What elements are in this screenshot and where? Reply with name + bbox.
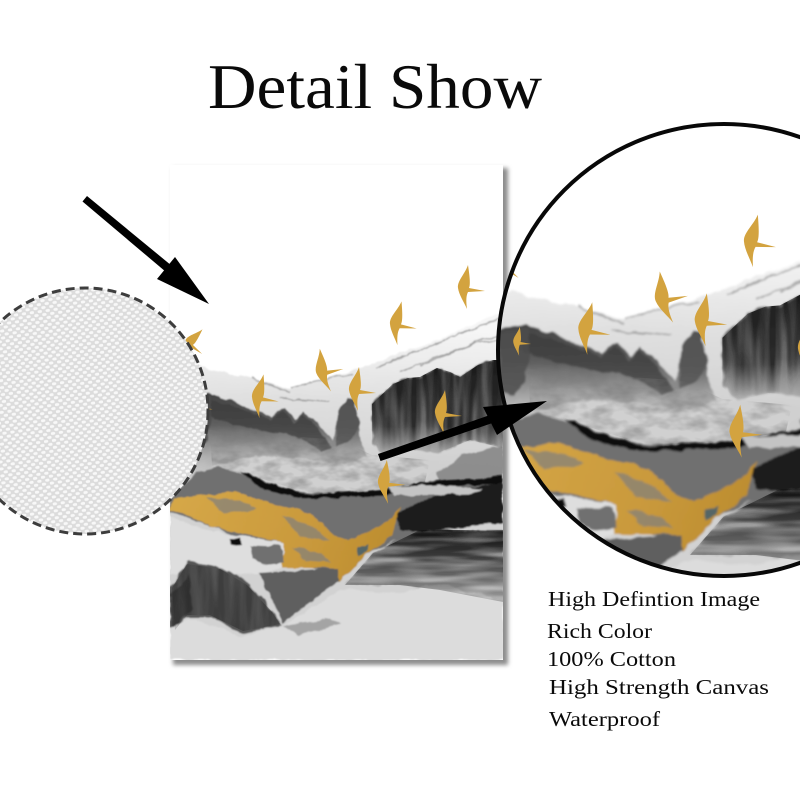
right ink cliffs <box>372 360 503 456</box>
detail magnifier circle <box>496 122 800 578</box>
canvas drop shadow <box>173 168 508 665</box>
feature list: Waterproof <box>549 707 661 731</box>
painting: ink mountains with gold birds <box>170 165 503 660</box>
feature list: High Strength Canvas <box>549 675 769 699</box>
feature list: Rich Color <box>547 619 652 643</box>
dark band <box>170 467 503 582</box>
left ink hills <box>170 393 372 475</box>
feature list <box>547 587 769 731</box>
feature list: 100% Cotton <box>547 647 676 671</box>
birds <box>176 265 485 504</box>
cliff streaks <box>372 360 503 456</box>
arrow to magnifier <box>378 401 547 461</box>
pale wash <box>212 456 440 494</box>
bottom light slab <box>170 583 503 660</box>
white hill and dark lower mountain <box>170 518 283 575</box>
title: Detail Show <box>208 52 543 122</box>
feature list: High Defintion Image <box>548 587 760 611</box>
lower right streaks <box>345 530 503 602</box>
light ridge <box>170 312 503 600</box>
mottled wash texture <box>210 430 430 494</box>
arrow to canvas <box>82 196 209 304</box>
fabric texture circle <box>0 288 208 534</box>
lower base light <box>170 510 503 660</box>
gold stroke <box>170 492 400 582</box>
